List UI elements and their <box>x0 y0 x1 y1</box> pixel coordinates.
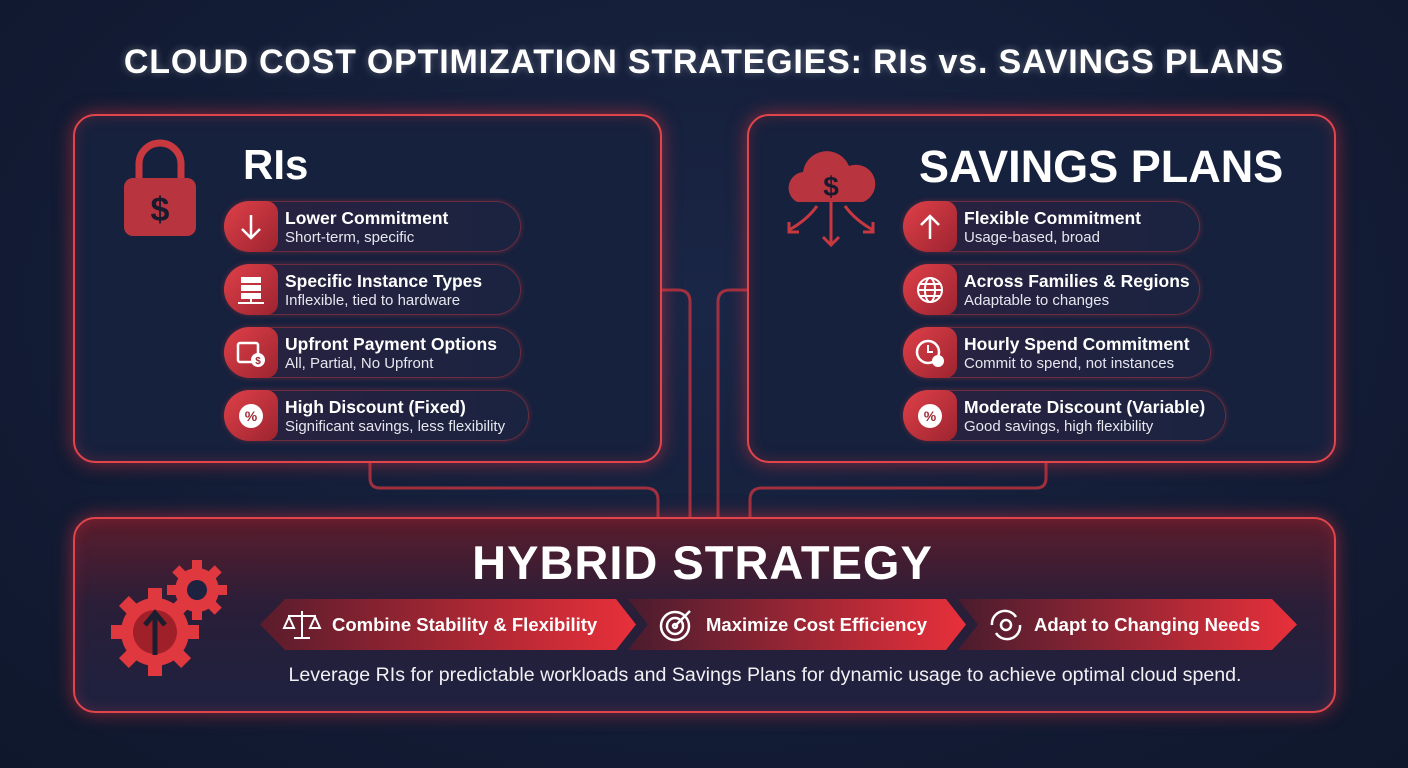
item: hourly spend <box>903 327 1211 378</box>
item: across families: Across Families & Regions <box>964 271 1190 291</box>
item: lower commitment <box>224 201 521 252</box>
icon: padlock: $ <box>151 191 170 229</box>
item: lower commitment: Lower Commitment <box>285 208 448 228</box>
icon: cloud dollar <box>788 151 876 247</box>
item: moderate discount: % <box>924 408 937 424</box>
item: upfront payment: All, Partial, No Upfront <box>285 355 433 372</box>
item: hourly spend: Hourly Spend Commitment <box>964 334 1190 354</box>
panel: hybrid strategy <box>73 517 1336 713</box>
item: moderate discount: Good savings, high flexibility <box>964 418 1153 435</box>
chevron: combine stability: Combine Stability & Flexibility <box>332 614 597 634</box>
item: upfront payment: Upfront Payment Options <box>285 334 497 354</box>
item: moderate discount <box>903 390 1226 441</box>
heading: hybrid strategy: HYBRID STRATEGY <box>472 536 933 589</box>
chevron: maximize efficiency <box>628 599 966 650</box>
item: hourly spend: Commit to spend, not instances <box>964 355 1174 372</box>
icon: padlock <box>124 140 196 236</box>
chevron: adapt needs <box>958 599 1297 650</box>
chevron: adapt needs: Adapt to Changing Needs <box>1034 614 1260 634</box>
item: high discount: Significant savings, less flexibility <box>285 418 505 435</box>
item: specific instance types <box>224 264 521 315</box>
item: high discount <box>224 390 529 441</box>
item: flexible commitment <box>903 201 1200 252</box>
item: flexible commitment: Flexible Commitment <box>964 208 1141 228</box>
icon: cloud dollar: $ <box>823 171 839 202</box>
item: specific instance types: Inflexible, tied to hardware <box>285 292 460 309</box>
item: specific instance types: Specific Instance Types <box>285 271 482 291</box>
panel: RIs <box>73 114 662 463</box>
panel: Savings Plans <box>747 114 1336 463</box>
chevron: combine stability <box>260 599 636 650</box>
title: CLOUD COST OPTIMIZATION STRATEGIES: RIs vs. SAVINGS PLANS <box>124 43 1284 81</box>
chevron: maximize efficiency: Maximize Cost Efficiency <box>706 614 927 634</box>
icon: gears <box>111 560 227 676</box>
item: lower commitment: Short-term, specific <box>285 229 414 246</box>
heading: RIs: RIs <box>243 141 308 188</box>
item: high discount: % <box>245 408 258 424</box>
item: moderate discount: Moderate Discount (Variable) <box>964 397 1205 417</box>
item: upfront payment: $ <box>255 356 261 366</box>
item: across families: Adaptable to changes <box>964 292 1109 309</box>
item: flexible commitment: Usage-based, broad <box>964 229 1100 246</box>
item: upfront payment <box>224 327 521 378</box>
item: across families <box>903 264 1200 315</box>
heading: Savings Plans: SAVINGS PLANS <box>919 141 1283 192</box>
item: high discount: High Discount (Fixed) <box>285 397 466 417</box>
footer text: Leverage RIs for predictable workloads and Savings Plans for dynamic usage to achieve optimal cloud spend. <box>288 664 1242 686</box>
